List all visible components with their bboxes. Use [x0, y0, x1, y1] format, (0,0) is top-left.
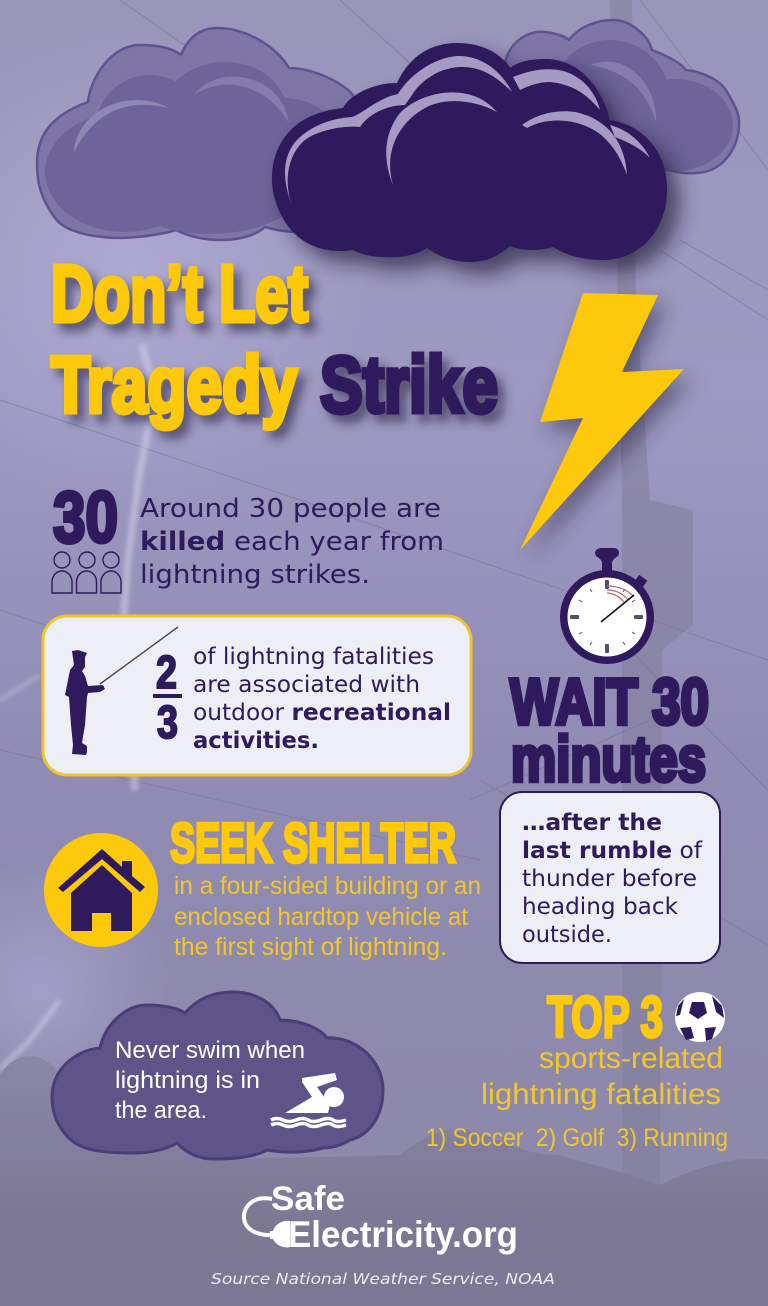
cloud: left background: [37, 28, 360, 240]
panel: wait note: …after the: [522, 810, 662, 836]
cloud: right background: [505, 20, 739, 173]
panel: wait note: last rumble of: [522, 838, 703, 864]
title: Tragedy: [58, 348, 304, 437]
panel: wait note: outside.: [522, 922, 612, 948]
logo: SafeElectricity.org: Safe: [271, 1180, 345, 1218]
stat text: Around 30 people are: [140, 494, 441, 524]
heading: wait 30 minutes: [510, 665, 709, 795]
panel: wait note: thunder before: [522, 866, 697, 892]
cloud: front dark storm cloud: [272, 43, 679, 274]
stat: 30 killed per year: [52, 478, 444, 593]
heading: wait 30 minutes: minutes: [511, 723, 706, 795]
title: Strike: [327, 348, 505, 437]
panel text: outdoor recreational: [193, 698, 451, 726]
panel text: of lightning fatalities: [193, 642, 434, 670]
panel: two thirds of fatalities: [43, 616, 471, 775]
section: seek shelter: enclosed hardtop vehicle at: [174, 903, 468, 931]
section: top 3 sports: 1) Soccer 2) Golf 3) Running: [426, 1124, 728, 1152]
title: Don’t Let: [51, 249, 308, 338]
stat text: [140, 494, 444, 590]
icon: lightning bolt: [520, 293, 692, 560]
icon: stopwatch: [560, 548, 654, 664]
fraction two thirds: 3: [157, 696, 178, 748]
title: [51, 249, 505, 437]
icon: three people: [52, 552, 121, 593]
section: top 3 sports: [426, 985, 728, 1152]
big number 30: 30: [53, 478, 118, 558]
section: seek shelter: SEEK SHELTER: [170, 811, 456, 874]
stat text: killed each year from: [140, 527, 444, 557]
panel: wait note: heading back: [522, 894, 679, 920]
cloud: never swim: lightning is in: [115, 1067, 260, 1094]
section: seek shelter: in a four-sided building or an: [174, 872, 481, 900]
cloud: never swim: Never swim when: [115, 1037, 305, 1064]
cloud: never swim: the area.: [115, 1097, 207, 1124]
icon: swimmer: [271, 1073, 346, 1126]
fraction two thirds: [153, 646, 182, 748]
source line: Source National Weather Service, NOAA: [211, 1270, 555, 1288]
fraction two thirds: 2: [156, 646, 177, 698]
panel: wait note: [500, 792, 720, 963]
icon: plug and cord: [244, 1198, 290, 1247]
section: top 3 sports: sports-related: [539, 1042, 723, 1075]
title: Don’t Let: [58, 257, 315, 346]
logo: SafeElectricity.org: Electricity.org: [288, 1214, 518, 1255]
panel text: are associated with: [193, 670, 420, 698]
section: seek shelter: the first sight of lightning.: [174, 933, 447, 961]
icon: fisherman silhouette: [65, 627, 178, 755]
logo: SafeElectricity.org: [244, 1180, 518, 1255]
title: Tragedy: [51, 340, 297, 429]
icon: house in yellow circle: [44, 833, 158, 947]
panel text: activities.: [193, 726, 319, 754]
title: Strike: [320, 340, 498, 429]
panel text: [193, 642, 451, 754]
section: top 3 sports: TOP 3: [547, 985, 663, 1050]
section: seek shelter: [170, 811, 481, 961]
stat text: lightning strikes.: [140, 560, 370, 590]
heading: wait 30 minutes: WAIT 30: [510, 665, 709, 738]
icon: soccer ball: [675, 992, 725, 1042]
section: top 3 sports: lightning fatalities: [481, 1078, 721, 1111]
cloud: never swim: [52, 992, 383, 1159]
